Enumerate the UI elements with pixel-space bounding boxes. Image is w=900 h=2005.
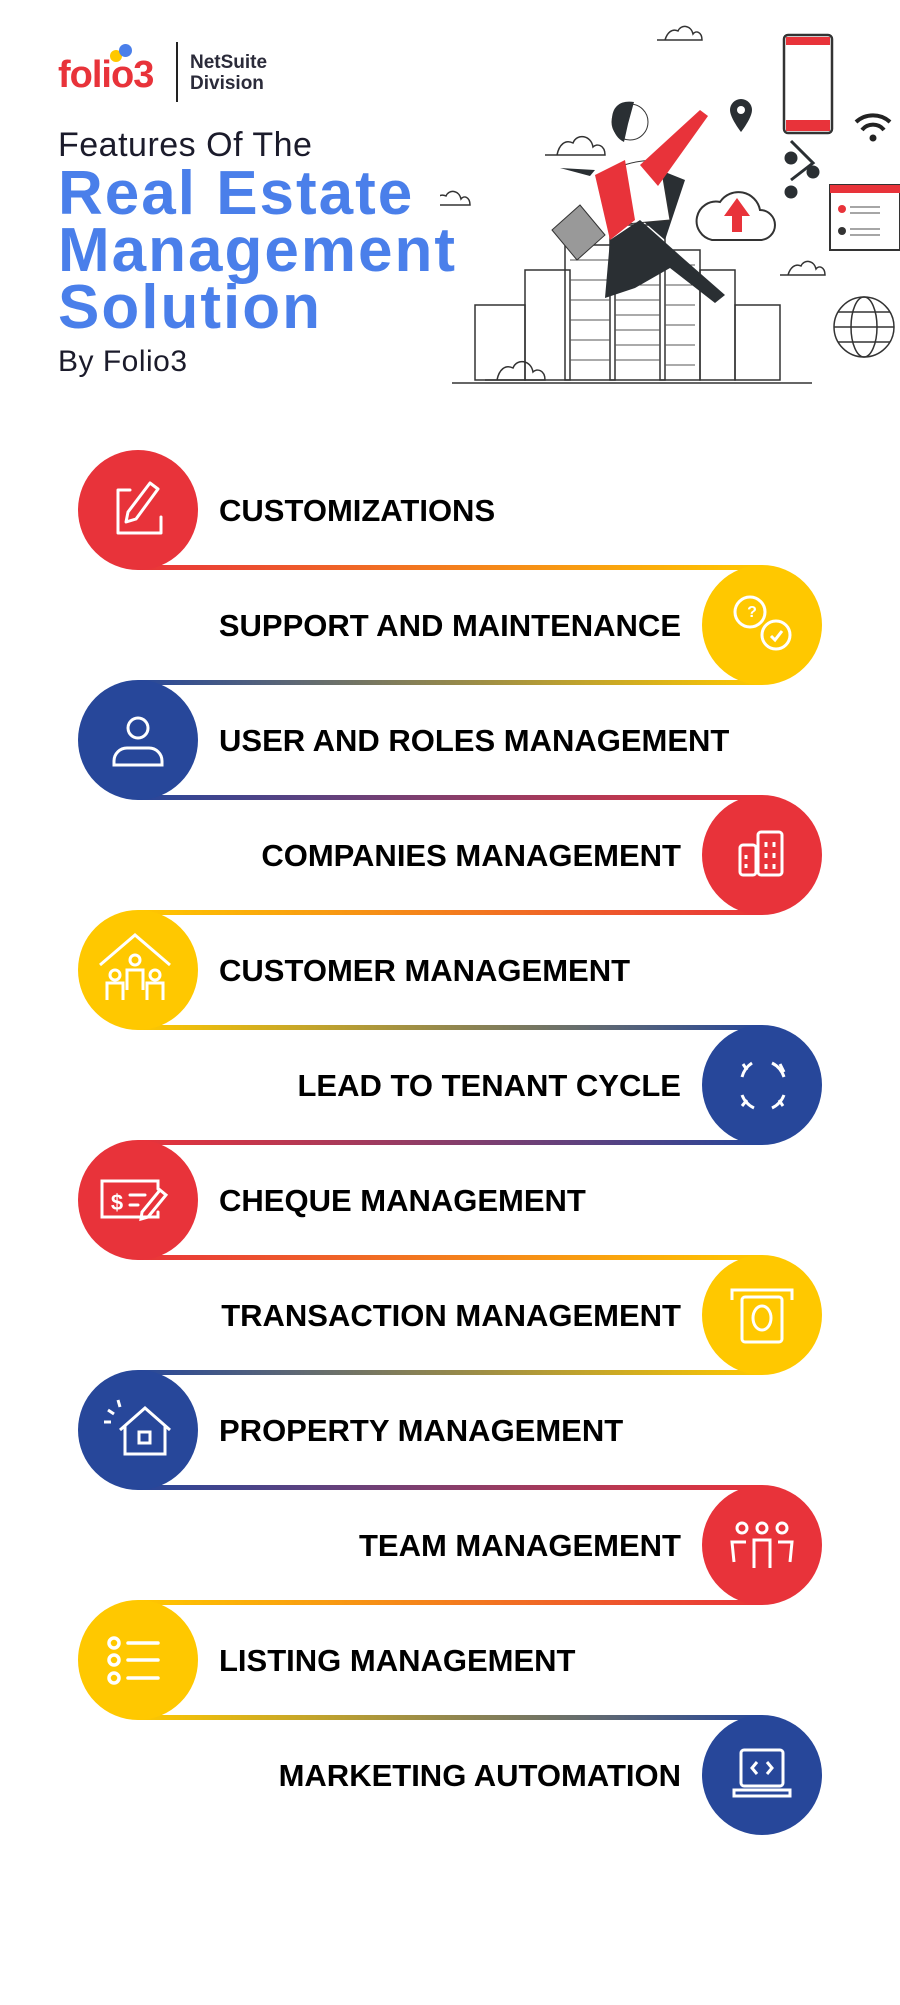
row: transaction management xyxy=(221,1255,822,1375)
globe xyxy=(834,297,894,357)
row: property management: PROPERTY MANAGEMENT xyxy=(219,1413,623,1448)
chat window xyxy=(830,185,900,250)
row: customer management: CUSTOMER MANAGEMENT xyxy=(219,953,630,988)
row: marketing automation: MARKETING AUTOMATION xyxy=(279,1758,681,1793)
title: By Folio3 xyxy=(58,345,188,378)
title xyxy=(58,126,457,378)
row: listing management xyxy=(78,1600,576,1720)
row: user and roles management xyxy=(78,680,729,800)
row: support and maintenance: SUPPORT AND MAINTENANCE xyxy=(219,608,681,643)
clouds xyxy=(545,137,605,155)
division label: Division xyxy=(190,73,264,94)
row: transaction management: TRANSACTION MANAGEMENT xyxy=(221,1298,681,1333)
wifi xyxy=(856,115,890,130)
row: cheque management: $ xyxy=(111,1190,123,1215)
row: customer management xyxy=(78,910,630,1030)
logo wordmark: folio3 xyxy=(58,54,153,96)
title: Real Estate xyxy=(58,159,414,228)
title: Features Of The xyxy=(58,126,312,164)
row: companies management xyxy=(261,795,822,915)
cloud upload xyxy=(697,192,775,240)
logo xyxy=(58,42,267,102)
row: lead to tenant cycle: LEAD TO TENANT CYCLE xyxy=(298,1068,681,1103)
row: support and maintenance: ? xyxy=(747,604,757,621)
share xyxy=(786,141,818,197)
phone xyxy=(784,35,832,133)
row: listing management: LISTING MANAGEMENT xyxy=(219,1643,576,1678)
title: Solution xyxy=(58,273,322,342)
row: support and maintenance xyxy=(219,565,822,685)
row: customizations: CUSTOMIZATIONS xyxy=(219,493,495,528)
row: user and roles management: USER AND ROLES MANAGEMENT xyxy=(219,723,729,758)
buildings xyxy=(475,305,525,380)
row: lead to tenant cycle xyxy=(298,1025,822,1145)
row: cheque management: CHEQUE MANAGEMENT xyxy=(219,1183,586,1218)
title: Management xyxy=(58,216,457,285)
division label: NetSuite xyxy=(190,52,267,73)
row: marketing automation xyxy=(279,1715,822,1835)
row: team management: TEAM MANAGEMENT xyxy=(359,1528,681,1563)
man xyxy=(552,102,725,303)
row: cheque management xyxy=(78,1140,586,1260)
division label xyxy=(190,52,267,94)
row: companies management: COMPANIES MANAGEMENT xyxy=(261,838,681,873)
row: team management xyxy=(359,1485,822,1605)
pin xyxy=(730,99,752,132)
illustration: businessman leaping over city xyxy=(440,26,900,384)
row: property management xyxy=(78,1370,623,1490)
row: customizations xyxy=(78,450,495,570)
